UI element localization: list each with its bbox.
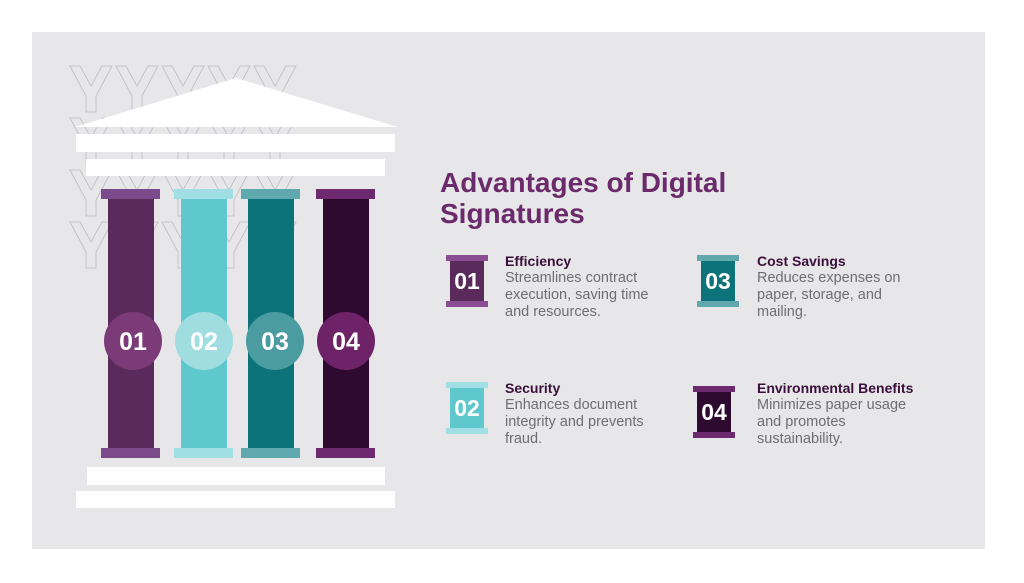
item 03: 03 [705,268,731,294]
column 01: 01 [119,328,147,356]
item 04 [693,380,913,447]
item 02: Security [505,380,560,396]
pillar graphic [76,78,398,508]
item 03 [697,253,900,320]
pattern [69,66,297,268]
item 03: Cost Savings [757,253,846,269]
item 04: Minimizes paper usage and promotes sustainability. [757,397,906,447]
title [440,167,726,229]
column 03: 03 [261,328,289,356]
column 04: 04 [332,328,360,356]
item 02 [446,380,644,447]
title: Advantages of Digital [440,167,726,198]
column 02 [174,189,233,458]
item 04: 04 [701,399,727,425]
title: Signatures [440,198,585,229]
column 03 [241,189,304,458]
item 01: 01 [454,268,480,294]
item 02: 02 [454,395,480,421]
item 03: Reduces expenses on paper, storage, and mailing. [757,270,900,320]
column 02: 02 [190,328,218,356]
column 01 [101,189,162,458]
roof [75,78,398,176]
item 01: Streamlines contract execution, saving time and resources. [505,270,648,320]
item 02: Enhances document integrity and prevents fraud. [505,397,644,447]
base [76,467,395,508]
item 01: Efficiency [505,253,571,269]
item 01 [446,253,648,320]
column 04 [316,189,375,458]
item 04: Environmental Benefits [757,380,913,396]
